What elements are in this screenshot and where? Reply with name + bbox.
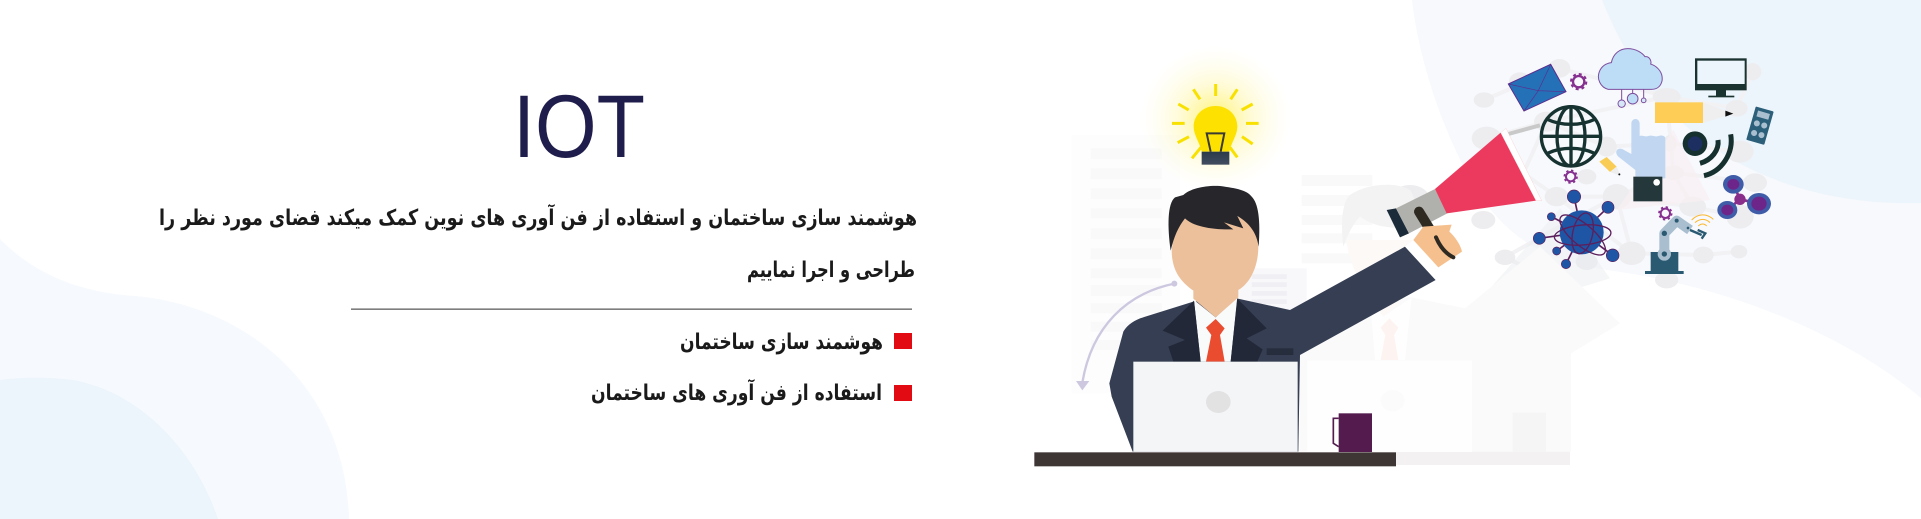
icon: virus network	[1533, 190, 1619, 269]
icon: pointing hand	[1616, 119, 1665, 201]
illustration: light bulb	[1141, 47, 1291, 190]
icon: molecule	[1717, 175, 1771, 219]
icon: gears	[1564, 74, 1672, 220]
text block: description line 2: طراحی و اجرا نماییم	[747, 258, 915, 283]
background blob: top right inner	[1602, 0, 1921, 203]
background blob: top right outer	[1412, 0, 1921, 398]
bullet item 2: استفاده از فن آوری های ساختمان	[591, 378, 882, 406]
icon group: IoT devices	[1508, 49, 1774, 274]
background blob: bottom left inner	[0, 378, 218, 519]
icon: wireless signal	[1683, 131, 1731, 176]
icon: small pencil	[1599, 157, 1621, 176]
background blob: bottom left outer	[0, 239, 349, 519]
divider rule	[351, 308, 912, 310]
bullet item 1: هوشمند سازی ساختمان	[680, 330, 883, 355]
illustration: desk and mug	[1034, 413, 1396, 466]
icon: large pencil	[1655, 102, 1733, 123]
illustration: hand and megaphone	[1387, 128, 1542, 280]
icon: yellow wifi arcs	[1692, 215, 1713, 226]
illustration: ghost buildings and ghost man	[1072, 135, 1620, 465]
icon: envelope	[1508, 64, 1566, 111]
illustration: laptop	[1133, 362, 1298, 452]
title: IOT	[513, 76, 645, 176]
icon: globe	[1541, 107, 1601, 166]
icon: calculator	[1746, 106, 1774, 145]
illustration: ghost background network	[1390, 59, 1767, 300]
text block: description line 1: هوشمند سازی ساختمان و استفاده از فن آوری های نوین کمک میکند فضای مورد نظر را	[159, 203, 917, 231]
icon: robot arm	[1645, 219, 1705, 274]
illustration: businessman	[1109, 186, 1436, 452]
icon: cloud	[1598, 49, 1662, 107]
illustration: curved arrow	[1076, 281, 1177, 390]
icon: monitor	[1695, 58, 1747, 97]
